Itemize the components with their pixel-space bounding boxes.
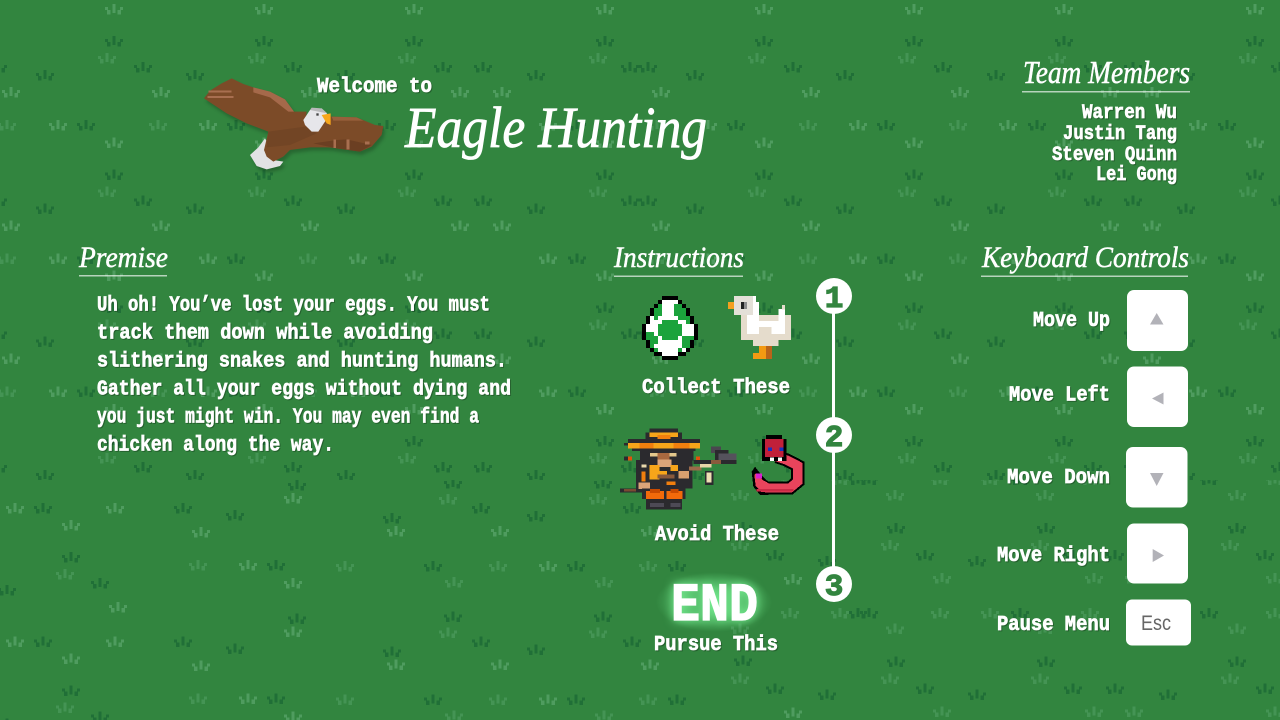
premise text: chicken along the way. [97,434,334,458]
title: Eagle Hunting [404,95,707,160]
team member names [1052,102,1177,187]
step badge 2 [816,417,852,456]
label: pursue this: Pursue This [654,634,778,657]
heading: team members: Team Members [1023,54,1190,90]
control: move right [997,524,1188,584]
step badge 1 [816,278,852,317]
control: move up: Move Up [1033,310,1110,333]
premise text: Uh oh! You’ve lost your eggs. You must [97,294,490,318]
step badge 3: 3 [825,570,843,605]
heading: instructions: Instructions [613,241,744,274]
panel: team members [1022,54,1190,187]
control: move up [1033,290,1188,351]
premise text: track them down while avoiding [97,322,433,346]
panel: premise [78,241,511,458]
step badge 1: 1 [825,282,843,317]
label: avoid these: Avoid These [655,524,779,547]
icon: spotted egg [642,298,698,358]
premise text: Gather all your eggs without dying and [97,378,511,402]
team member names: Steven Quinn [1052,144,1177,167]
icon: hunter with rifle [620,428,737,510]
premise text [97,294,511,458]
icon: flying eagle [204,78,383,169]
END glowing text: END [671,576,758,637]
step badge 2: 2 [825,421,843,456]
icon: white chicken [728,296,791,359]
team member names: Warren Wu [1082,102,1177,125]
control: pause menu: Esc [1141,612,1171,635]
heading: premise: Premise [78,241,168,274]
control: move down [1007,447,1188,508]
heading: keyboard controls: Keyboard Controls [981,241,1189,274]
subtitle: welcome: Welcome to [317,76,432,99]
control: move left [1009,366,1188,427]
control: move left: Move Left [1009,384,1110,408]
control: pause menu: Pause Menu [997,614,1110,637]
premise text: you just might win. You may even find a [97,406,479,430]
step badge 3 [816,566,852,605]
control: move right: Move Right [997,545,1110,568]
premise text: slithering snakes and hunting humans. [97,350,507,374]
panel: instructions [613,241,852,657]
timeline line [832,296,835,584]
control: move down: Move Down [1007,467,1110,490]
team member names: Lei Gong [1096,164,1177,187]
control: pause menu [997,600,1191,646]
icon: red snake [752,435,798,495]
team member names: Justin Tang [1063,123,1177,146]
label: collect these: Collect These [642,377,790,400]
panel: keyboard controls [981,241,1191,646]
